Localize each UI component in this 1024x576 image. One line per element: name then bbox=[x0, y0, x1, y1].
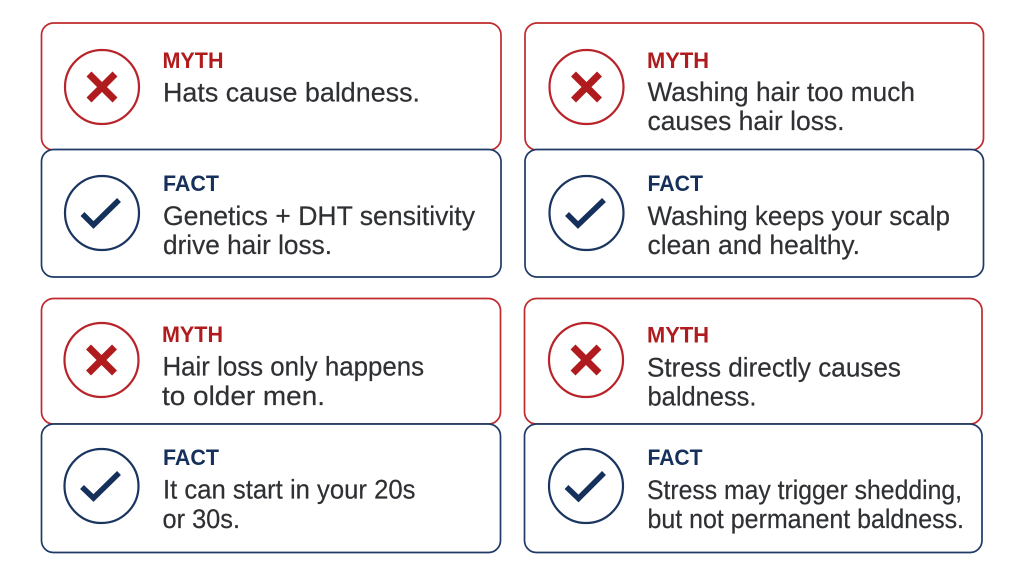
myth card: washing bbox=[525, 23, 984, 150]
myth card: hats bbox=[42, 23, 501, 150]
fact text: drive hair loss. bbox=[163, 230, 332, 260]
icon: navy check in circle bbox=[65, 176, 139, 250]
fact card: genetics bbox=[42, 150, 501, 277]
myth label: MYTH bbox=[647, 322, 709, 348]
fact label: FACT bbox=[163, 445, 220, 470]
fact text bbox=[647, 475, 964, 534]
icon: navy check in circle bbox=[64, 449, 138, 523]
fact text: or 30s. bbox=[162, 504, 240, 534]
icon: red cross in circle bbox=[65, 50, 139, 124]
fact label: FACT bbox=[163, 171, 220, 196]
fact card: age bbox=[42, 424, 500, 552]
myth text: Hair loss only happens bbox=[162, 352, 424, 382]
panel: age myth and fact pair bbox=[42, 298, 500, 552]
icon: navy check in circle bbox=[550, 176, 624, 250]
myth text bbox=[647, 352, 901, 412]
panel: stress myth and fact pair bbox=[524, 298, 982, 552]
myth card: stress bbox=[524, 298, 982, 424]
fact text bbox=[163, 201, 476, 260]
icon: red cross in circle bbox=[64, 323, 138, 397]
myth text: to older men. bbox=[162, 381, 325, 411]
myth card: age bbox=[42, 298, 500, 424]
fact text: but not permanent baldness. bbox=[648, 504, 964, 534]
fact card: stress bbox=[524, 424, 982, 552]
myth text: Washing hair too much bbox=[648, 77, 915, 107]
fact text: Stress may trigger shedding, bbox=[647, 475, 962, 505]
fact card: washing bbox=[525, 150, 984, 277]
fact text: clean and healthy. bbox=[648, 230, 860, 260]
myth label: MYTH bbox=[162, 322, 223, 347]
icon: red cross in circle bbox=[549, 323, 623, 397]
panel: hats myth and fact pair bbox=[42, 23, 501, 277]
myth text: baldness. bbox=[648, 382, 756, 412]
myth text: causes hair loss. bbox=[648, 106, 844, 136]
myth text: Hats cause baldness. bbox=[163, 78, 420, 108]
panel: washing myth and fact pair bbox=[525, 23, 984, 277]
myth text bbox=[648, 77, 915, 136]
fact label: FACT bbox=[648, 171, 704, 196]
myth text bbox=[162, 352, 424, 411]
myth text: Stress directly causes bbox=[647, 352, 901, 382]
fact text: Genetics + DHT sensitivity bbox=[163, 201, 476, 231]
fact text: Washing keeps your scalp bbox=[648, 201, 950, 231]
fact text bbox=[162, 474, 416, 534]
myth label: MYTH bbox=[162, 48, 224, 73]
myth label: MYTH bbox=[647, 48, 709, 73]
fact text: It can start in your 20s bbox=[163, 474, 416, 504]
icon: red cross in circle bbox=[550, 50, 624, 124]
fact label: FACT bbox=[648, 445, 703, 470]
fact text bbox=[648, 201, 950, 260]
icon: navy check in circle bbox=[549, 449, 623, 523]
